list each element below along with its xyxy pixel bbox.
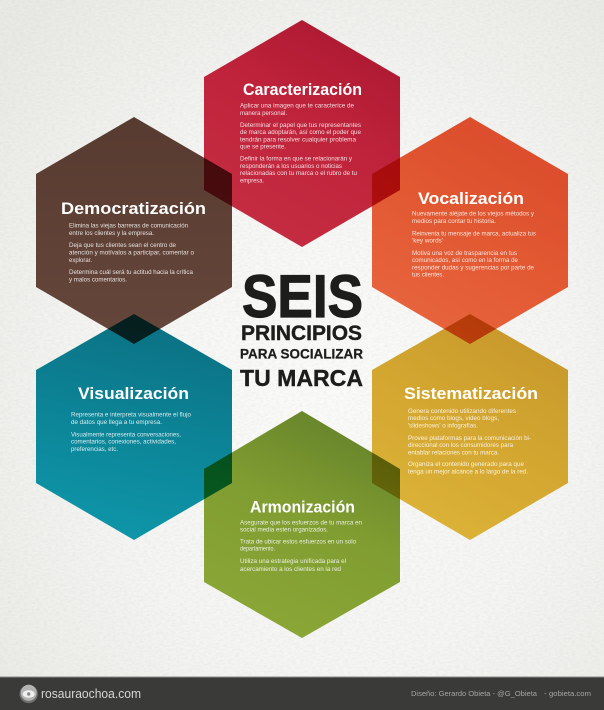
text block: Armonización: Utiliza una estrategia unificada para el (240, 558, 346, 565)
central title (240, 263, 363, 391)
text block: Armonización: Trata de ubicar estos esfuerzos en un solo (240, 539, 356, 546)
heading: Democratización: Democratización (61, 200, 206, 218)
hexagon: green (204, 411, 400, 638)
panel: Caracterización (204, 20, 400, 247)
text block: Visualización: comentarios, conexiones, actividades, (71, 439, 176, 446)
text block: Democratización: explorar. (69, 257, 92, 264)
text block: Democratización: atención y motívalos a participar, comentar o (69, 250, 194, 257)
text block: Democratización: y malos comentarios. (69, 277, 127, 284)
text block: Vocalización: Reinventa tu mensaje de marca, actualiza tus (412, 231, 537, 238)
text block: Caracterización: empresa. (240, 178, 264, 185)
text block: Democratización: Deja que tus clientes sean el centro de (69, 242, 176, 249)
text block: Sistematización: tenga un mejor alcance a lo largo de la red. (408, 469, 528, 476)
text block: Caracterización: que se presente. (240, 144, 286, 151)
text block: Sistematización: medios como blogs, video blogs, (408, 415, 499, 422)
text block: Democratización: Determina cuál será tu actitud hacia la crítica (69, 269, 193, 276)
text block: Vocalización: medios para contar tu historia. (412, 218, 496, 225)
text block: Vocalización: tus clientes. (412, 272, 444, 279)
text block: Sistematización: 'slideshows' o infografías. (408, 422, 478, 429)
text block: Vocalización (412, 210, 537, 279)
panel: Sistematización (372, 314, 568, 540)
hexagon: brown (36, 117, 232, 344)
heading: Caracterización: Caracterización (243, 81, 362, 99)
text block: Sistematización: Organiza el contenido generado para que (408, 461, 524, 468)
text block: Caracterización: de marca adoptarán, así como el poder que (240, 129, 361, 136)
text block: Visualización: de datos que llega a tu empresa. (71, 419, 162, 426)
text block: Vocalización: responder dudas y sugerencias por parte de (412, 264, 534, 271)
text block: Caracterización: responderán a los usuarios o noticias (240, 163, 343, 170)
central title: PARA SOCIALIZAR (240, 347, 363, 362)
text block: Caracterización: manera personal. (240, 110, 287, 117)
hexagon: red (204, 20, 400, 247)
hexagon: yellow (372, 314, 568, 540)
text block: Sistematización: direccional con los consumidores para (408, 442, 513, 449)
text block: Caracterización: Determinar el papel que tus representantes (240, 122, 362, 129)
text block: Democratización: Elimina las viejas barreras de comunicación (69, 223, 188, 230)
footer credits: gobieta.com (549, 689, 591, 698)
hexagon: teal (36, 314, 232, 540)
central title: TU MARCA (240, 365, 363, 391)
text block: Caracterización: Aplicar una imagen que te caracterice de (240, 103, 354, 110)
text block: Vocalización: Motiva una voz de trasparencia en tus (412, 250, 518, 257)
text block: Visualización: Representa e interpreta visualmente el flujo (71, 412, 191, 419)
text block: Democratización: entre los clientes y la empresa. (69, 230, 154, 237)
text block: Sistematización: Provee plataformas para la comunicación bi- (408, 435, 531, 442)
central title: PRINCIPIOS (241, 322, 362, 345)
text block: Armonización: Asegurate que los esfuerzos de tu marca en (240, 519, 362, 526)
text block: Vocalización: 'key words' (412, 238, 443, 245)
panel: Vocalización (372, 117, 568, 344)
text block: Caracterización: Definir la forma en que se relacionarán y (240, 155, 353, 162)
footer credits (411, 689, 591, 698)
footer brand: rosauraochoa.com: rosauraochoa.com (41, 687, 141, 701)
text block: Sistematización: Genera contenido utilizando diferentes (408, 408, 517, 415)
panel: Visualización (36, 314, 232, 540)
heading: Visualización: Visualización (78, 385, 189, 403)
text block: Caracterización: tendrán para resolver cualquier problema (240, 136, 356, 143)
text block: Caracterización (240, 103, 362, 185)
hexagon: orange (372, 117, 568, 344)
footer credits: - (544, 689, 547, 698)
text block: Visualización: preferencias, etc. (71, 446, 118, 453)
icon: logo with speech bubble (20, 685, 38, 703)
central title: SEIS (242, 263, 363, 330)
panel: Armonización (204, 411, 400, 638)
heading: Armonización: Armonización (250, 499, 355, 517)
text block: Vocalización: comunicados, así como en la forma de (412, 257, 518, 264)
heading: Vocalización: Vocalización (418, 190, 524, 208)
text block: Armonización: departamento. (240, 546, 275, 553)
text block: Armonización: social media esten organizados. (240, 526, 328, 533)
footer credits: Diseño: Gerardo Obieta - @G_Obieta (411, 689, 538, 698)
text block: Armonización: acercamiento a los clientes en la red (240, 566, 341, 573)
text block: Caracterización: relacionadas con tu marca o el rubro de tu (240, 170, 357, 177)
hexagon white underlay (36, 20, 568, 638)
text block: Armonización (240, 519, 362, 573)
text block: Vocalización: Nuevamente aléjate de los viejos métodos y (412, 210, 535, 217)
text block: Visualización (71, 412, 191, 453)
panel: Democratización (36, 117, 232, 344)
text block: Sistematización: entablar relaciones con tu marca. (408, 449, 499, 456)
footer bar (0, 676, 604, 710)
text block: Sistematización (408, 408, 531, 476)
text block: Visualización: Visualmente representa conversaciones, (71, 431, 181, 438)
text block: Democratización (69, 223, 194, 284)
heading: Sistematización: Sistematización (404, 385, 538, 403)
